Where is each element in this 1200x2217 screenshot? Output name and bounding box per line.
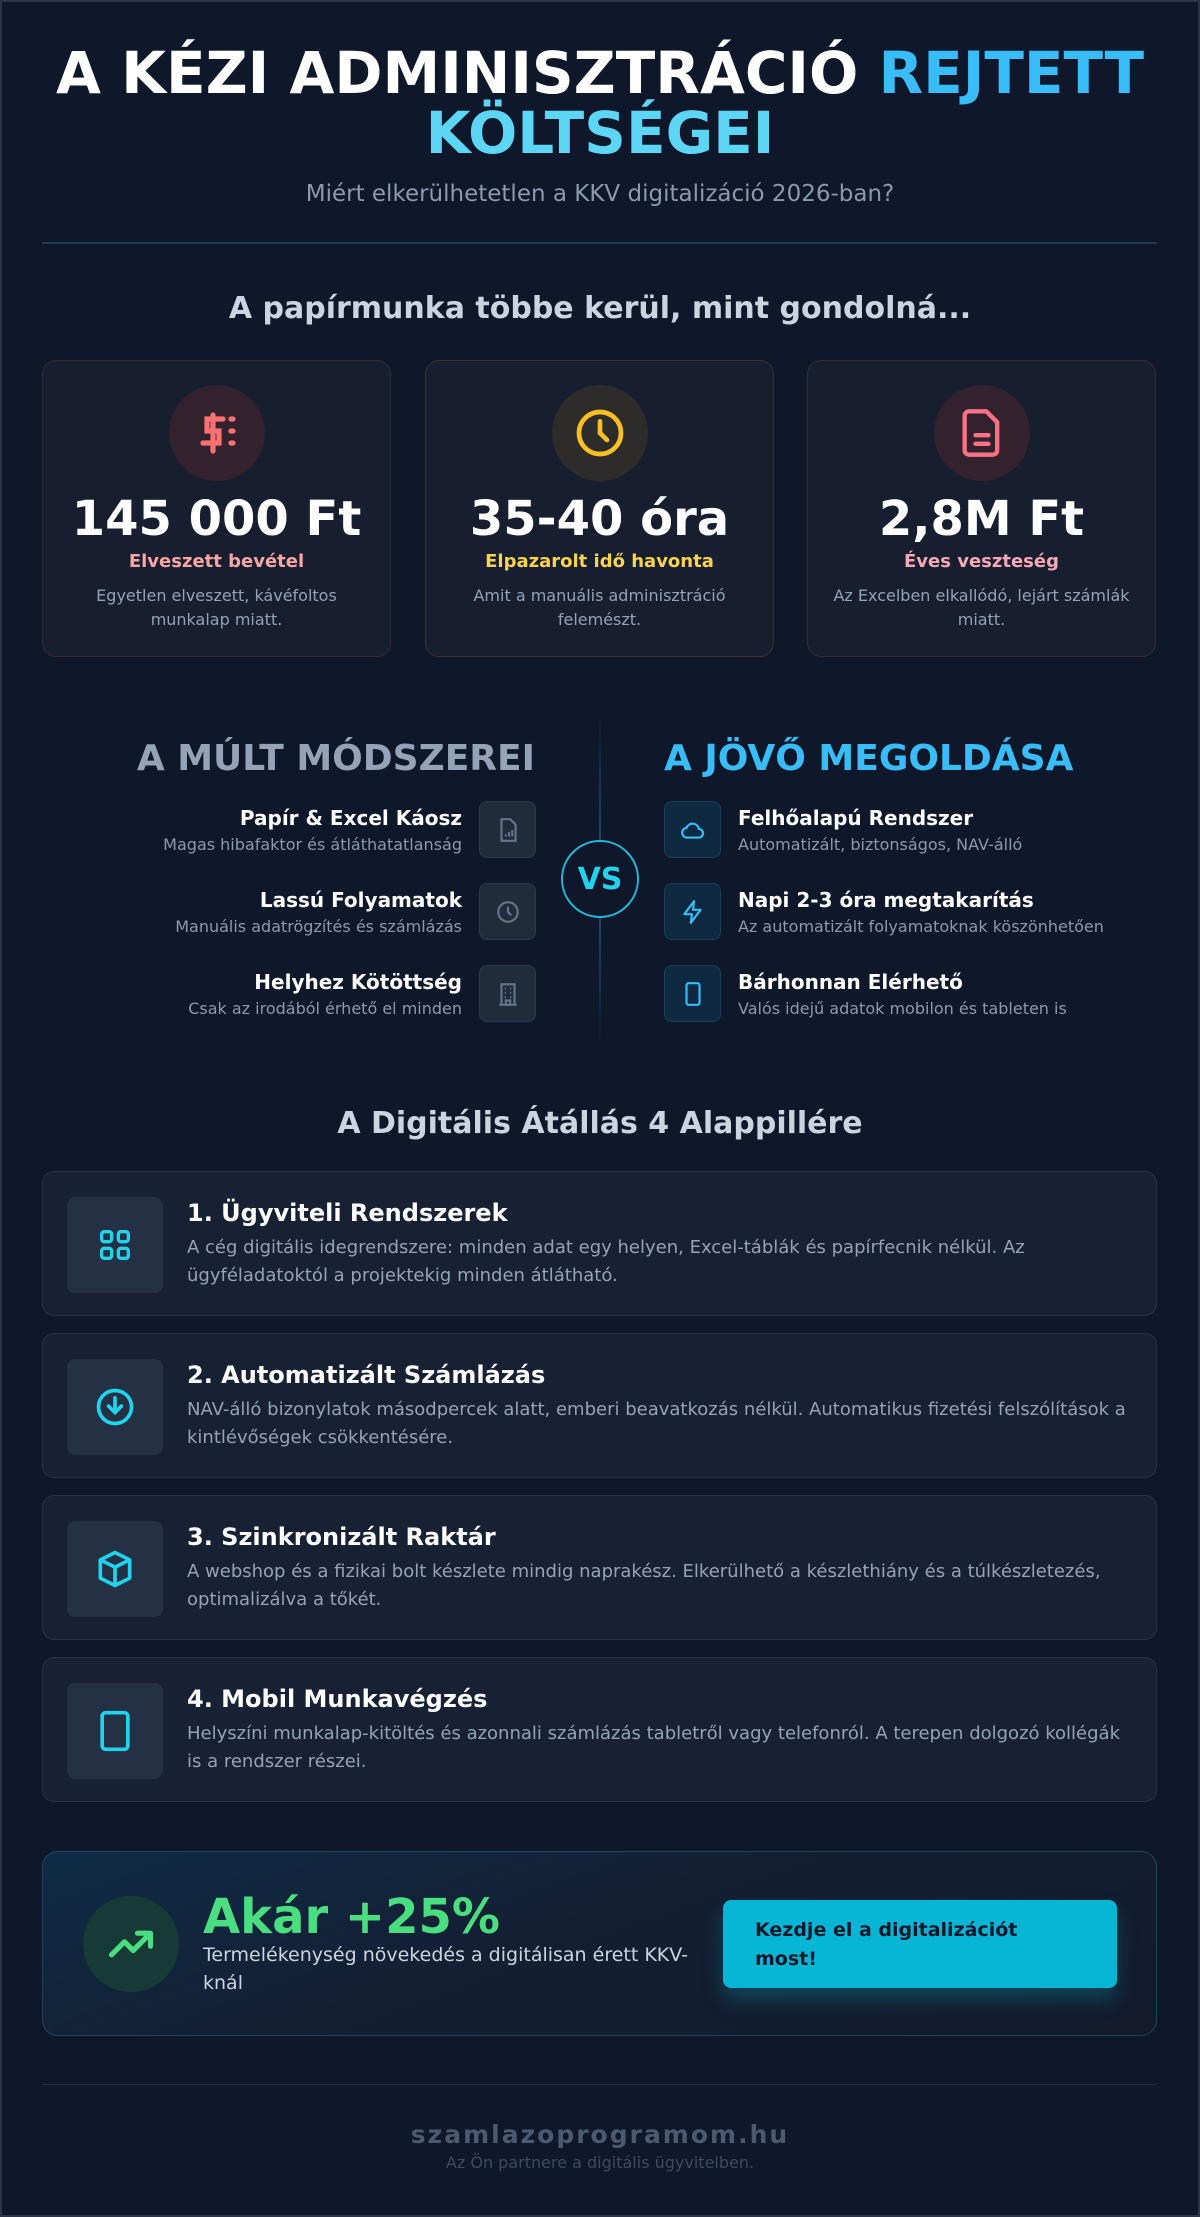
future item 2 xyxy=(664,883,1104,940)
icon: clock xyxy=(552,385,648,481)
future item 2: Napi 2-3 óra megtakarítás xyxy=(738,888,1034,912)
stat card 1: Elveszett bevétel xyxy=(129,551,304,572)
pillar 4: 4. Mobil Munkavégzés xyxy=(187,1685,487,1713)
future item 1: Automatizált, biztonságos, NAV-álló xyxy=(738,835,1022,854)
icon: download circle xyxy=(67,1359,163,1455)
pillar 4 xyxy=(42,1657,1157,1802)
stat card 2: Amit a manuális adminisztráció felemészt. xyxy=(473,586,726,629)
footer brand: szamlazoprogramom.hu xyxy=(411,2120,789,2149)
pillar 1 xyxy=(42,1171,1157,1316)
pillar 1: 1. Ügyviteli Rendszerek xyxy=(187,1199,508,1227)
stat card 3: 2,8M Ft xyxy=(879,491,1084,547)
CTA button: Kezdje el a digitalizációt most! xyxy=(755,1919,1017,1970)
icon: tablet xyxy=(67,1683,163,1779)
CTA button xyxy=(723,1900,1117,1988)
past item 3: Csak az irodából érhető el minden xyxy=(188,999,462,1018)
heading: future: A JÖVŐ MEGOLDÁSA xyxy=(664,738,1073,779)
CTA panel xyxy=(42,1851,1157,2036)
pillar 2: 2. Automatizált Számlázás xyxy=(187,1361,545,1389)
future item 1: Felhőalapú Rendszer xyxy=(738,806,973,830)
pillar 2 xyxy=(42,1333,1157,1478)
icon: trending up xyxy=(83,1896,179,1992)
CTA text: Termelékenység növekedés a digitálisan érett KKV-knál xyxy=(203,1944,688,1994)
title: A KÉZI ADMINISZTRÁCIÓ REJTETT xyxy=(56,39,1144,107)
comparison section xyxy=(137,731,1104,1028)
icon: grid xyxy=(67,1197,163,1293)
title: KÖLTSÉGEI xyxy=(426,99,774,167)
VS badge xyxy=(561,840,639,918)
future item 1 xyxy=(664,801,1022,858)
past item 2: Lassú Folyamatok xyxy=(260,888,462,912)
stat card 2: Elpazarolt idő havonta xyxy=(485,551,714,572)
stat card 1: 145 000 Ft xyxy=(72,491,361,547)
footer tagline: Az Ön partnere a digitális ügyvitelben. xyxy=(446,2153,754,2172)
pillar 1: A cég digitális idegrendszere: minden adat egy helyen, Excel-táblák és papírfecnik nélkül. Az ügyféladatoktól a projektekig minden átlátható. xyxy=(187,1237,1025,1286)
past item 3: Helyhez Kötöttség xyxy=(254,970,462,994)
CTA stat: Akár +25% xyxy=(203,1889,500,1945)
stat card 1: Egyetlen elveszett, kávéfoltos munkalap miatt. xyxy=(96,586,337,629)
past item 2: Manuális adatrögzítés és számlázás xyxy=(175,917,462,936)
heading: pillars: A Digitális Átállás 4 Alappillére xyxy=(337,1106,863,1141)
title xyxy=(56,39,1144,167)
VS badge: VS xyxy=(578,862,622,896)
pillar 4: Helyszíni munkalap-kitöltés és azonnali számlázás tabletről vagy telefonról. A terepen dolgozó kollégák is a rendszer részei. xyxy=(187,1723,1120,1772)
stat card 2 xyxy=(425,360,774,657)
pillar 3: 3. Szinkronizált Raktár xyxy=(187,1523,496,1551)
past item 1 xyxy=(163,801,536,858)
stat card 1 xyxy=(42,360,391,657)
subtitle: Miért elkerülhetetlen a KKV digitalizáció 2026-ban? xyxy=(306,181,894,207)
future item 3 xyxy=(664,965,1067,1022)
future item 3: Bárhonnan Elérhető xyxy=(738,970,963,994)
heading: past: A MÚLT MÓDSZEREI xyxy=(137,738,535,779)
stat card 3 xyxy=(807,360,1156,657)
icon: money xyxy=(169,385,265,481)
pillar 3 xyxy=(42,1495,1157,1640)
heading: paperwork: A papírmunka többe kerül, mint gondolná... xyxy=(229,291,971,326)
stat card 3: Az Excelben elkallódó, lejárt számlák miatt. xyxy=(833,586,1130,629)
stat card 2: 35-40 óra xyxy=(470,491,729,547)
future item 2: Az automatizált folyamatoknak köszönhetően xyxy=(738,917,1104,936)
icon: document xyxy=(934,385,1030,481)
past item 1: Papír & Excel Káosz xyxy=(240,806,462,830)
future item 3: Valós idejű adatok mobilon és tableten is xyxy=(738,999,1067,1018)
past item 3 xyxy=(188,965,536,1022)
stat card 3: Éves veszteség xyxy=(904,551,1059,572)
icon: box xyxy=(67,1521,163,1617)
past item 2 xyxy=(175,883,536,940)
past item 1: Magas hibafaktor és átláthatatlanság xyxy=(163,835,462,854)
pillar 3: A webshop és a fizikai bolt készlete mindig naprakész. Elkerülhető a készlethiány és a túlkészletezés, optimalizálva a tőkét. xyxy=(187,1561,1101,1610)
pillar 2: NAV-álló bizonylatok másodpercek alatt, emberi beavatkozás nélkül. Automatikus fizetési felszólítások a kintlévőségek csökkentésére. xyxy=(187,1399,1126,1448)
